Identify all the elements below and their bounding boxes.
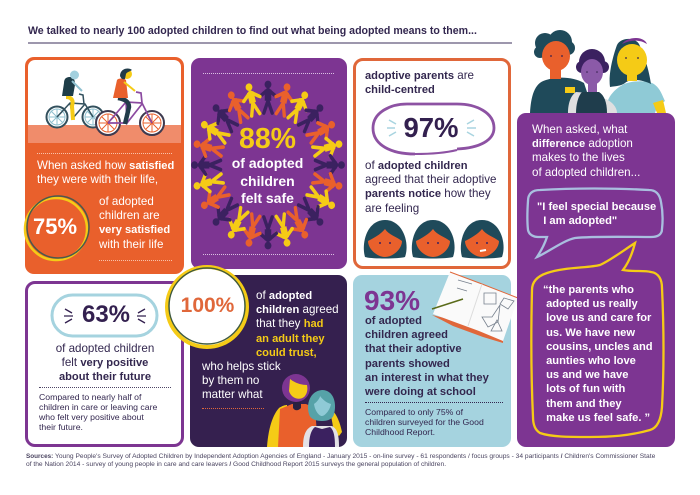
text: very satisfied: children are: [99, 209, 160, 222]
text: very satisfied: very satisfied: [99, 224, 170, 236]
text: very satisfied: with their life: [99, 238, 163, 251]
dotted rule: [203, 254, 334, 255]
text: interest in school: children agreed: [365, 329, 448, 341]
text: notice feelings: agreed that their adoptive: [365, 173, 496, 186]
quote text: [543, 284, 653, 424]
text: difference intro: difference adoption: [532, 137, 633, 150]
text: notice feelings: are feeling: [365, 202, 419, 215]
panel: future: [25, 281, 184, 447]
text: comparison good childhood: Compared to only 75% of: [365, 407, 463, 417]
quote text: aunties who love: [546, 355, 636, 367]
text: difference intro: makes to the lives: [532, 151, 625, 164]
text: comparison care: Compared to nearly half of: [39, 392, 141, 402]
text: comparison good childhood: [365, 407, 484, 437]
panel: child-centred: [353, 58, 511, 269]
dotted rule: [203, 73, 334, 74]
text: adult trust: [256, 289, 339, 359]
illustration background: [28, 60, 181, 125]
quote text: cousins, uncles and: [546, 341, 653, 353]
text: very satisfied: [99, 195, 170, 251]
dotted rule: [39, 387, 171, 388]
dotted rule: [202, 408, 264, 409]
text: adult trust: children agreed: [256, 303, 339, 316]
text: stick by them: matter what: [202, 388, 263, 401]
text: comparison good childhood: Childhood Report.: [365, 427, 435, 437]
text: notice feelings: parents notice how they: [365, 187, 491, 200]
panel: felt safe: [191, 58, 347, 269]
text: very satisfied: of adopted: [99, 195, 154, 208]
text: interest in school: that their adoptive: [365, 343, 462, 355]
badge value: 97%: [403, 112, 459, 143]
text: felt safe: children: [240, 172, 295, 188]
text: difference intro: of adopted children...: [532, 166, 640, 179]
quote text: make us feel safe. ”: [546, 412, 650, 424]
text: satisfied intro: they were with their life,: [37, 173, 158, 186]
text: child-centred heading: [365, 69, 474, 96]
text: adult trust: an adult they: [256, 333, 325, 345]
badge: 75%: [24, 195, 90, 262]
badge: 100%: [165, 265, 249, 349]
text: interest in school: parents showed: [365, 358, 450, 370]
panel: school: [353, 275, 511, 447]
title: We talked to nearly 100 adopted children to find out what being adopted means to them...: [28, 25, 477, 37]
text: notice feelings: [365, 159, 496, 215]
stat: 93%: 93%: [364, 285, 420, 316]
text: felt safe: of adopted: [232, 155, 303, 171]
panel: life satisfaction: [25, 57, 184, 274]
middle child: [568, 92, 617, 113]
text: adult trust: of adopted: [256, 289, 312, 302]
text: comparison good childhood: children surveyed for the Good: [365, 417, 484, 427]
dotted rule: [365, 402, 503, 403]
text: child-centred heading: child-centred: [365, 84, 435, 96]
sources: of the Nation 2014 - survey of young people in care and care leavers / Good Childhood Report 2015 surveys the general population of children.: [26, 461, 446, 468]
text: interest in school: an interest in what they: [365, 372, 489, 384]
text: stick by them: who helps stick: [202, 360, 281, 373]
quote text: adopted us really: [546, 298, 638, 310]
text: felt safe: felt safe: [241, 190, 294, 206]
quote text: I am adopted": [543, 215, 617, 227]
speech bubble: special: [526, 187, 664, 260]
text: stick by them: by them no: [202, 374, 259, 387]
sources: Sources: Young People's Survey of Adopted Children by Independent Adoption Agencies of England - January 2015 - on-line survey - 61 respondents / focus groups - 34 participants / Children's Commissioner State: [26, 453, 655, 460]
panel: trusted adult: [190, 275, 347, 447]
text: child-centred heading: adoptive parents are: [365, 69, 474, 82]
dotted rule: [37, 153, 172, 154]
quote text: “the parents who: [543, 284, 634, 296]
text: positive about future: of adopted children: [56, 342, 154, 355]
boy: [530, 78, 594, 113]
text: adult trust: could trust,: [256, 347, 317, 359]
quote text: love us and care for: [546, 312, 651, 324]
quote text: us. We have new: [546, 327, 635, 339]
text: positive about future: [56, 342, 154, 383]
badge value: 75%: [33, 214, 77, 239]
girl: [606, 81, 665, 113]
text: interest in school: of adopted: [365, 315, 422, 327]
quote text: lots of fun with: [546, 383, 625, 395]
title rule: [28, 42, 512, 44]
sources: [26, 453, 655, 468]
text: positive about future: felt very positive: [62, 356, 148, 369]
text: interest in school: were doing at school: [365, 386, 476, 398]
badge value: 63%: [82, 301, 130, 328]
text: notice feelings: of adopted children: [365, 159, 468, 172]
text: comparison care: [39, 392, 157, 432]
badge: 63%: [50, 294, 158, 338]
text: difference intro: When asked, what: [532, 123, 627, 136]
quote text: us and we have: [546, 369, 628, 381]
text: satisfied intro: [37, 159, 174, 186]
text: comparison care: who felt very positive about: [39, 412, 144, 422]
text: satisfied intro: When asked how satisfied: [37, 159, 174, 172]
speech bubble: parents quote: [530, 240, 665, 438]
badge value: 100%: [181, 294, 234, 317]
badge: 97%: [372, 102, 496, 156]
stat: 88%: 88%: [239, 123, 296, 155]
quote text: [537, 201, 656, 227]
text: felt safe: [232, 155, 303, 206]
text: interest in school: [365, 315, 489, 398]
dotted rule: [99, 260, 172, 261]
text: stick by them: [202, 360, 281, 401]
text: adult trust: that they had: [256, 317, 323, 330]
quote text: "I feel special because: [537, 201, 656, 213]
text: positive about future: about their future: [59, 371, 151, 383]
quote text: them and they: [546, 398, 622, 410]
text: comparison care: their future.: [39, 422, 83, 432]
panel: what difference: [517, 113, 675, 447]
text: difference intro: [532, 123, 640, 179]
text: comparison care: children in care or leaving care: [39, 402, 157, 412]
